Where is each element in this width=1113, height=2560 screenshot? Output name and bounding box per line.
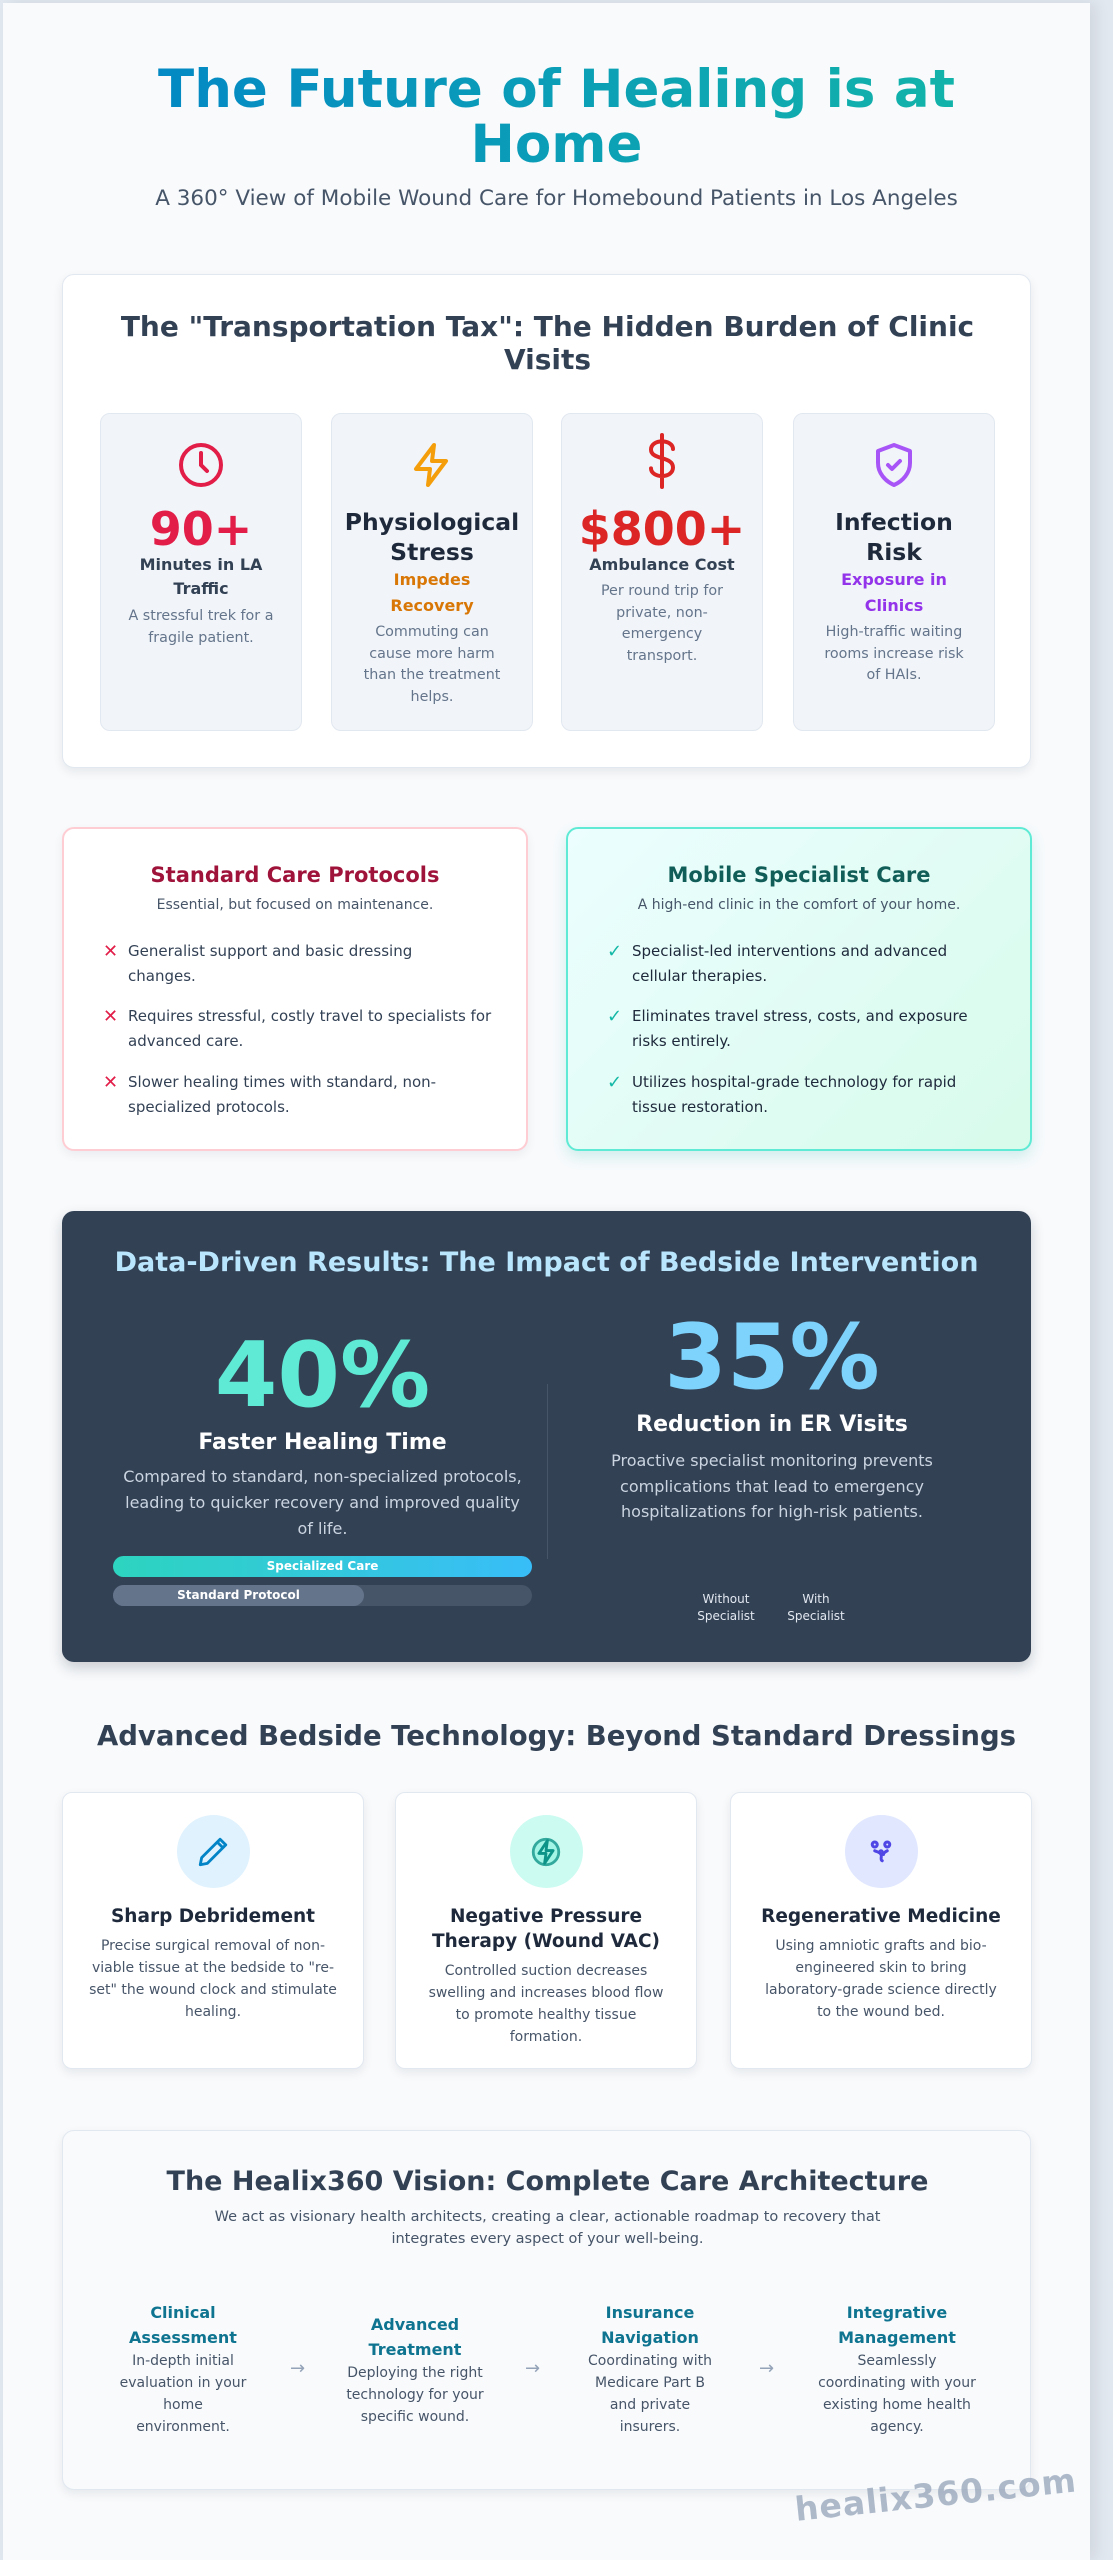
stat card: stress: Recovery [390, 596, 474, 615]
subheading: Essential, but focused on maintenance. [157, 897, 433, 913]
stat card: ambulance cost: $800+ [579, 502, 745, 556]
stat: 40% faster healing: Compared to standard, non-specialized protocols, leading to quicker recovery and improved quality [123, 1467, 522, 1512]
list item: Eliminates travel stress, costs, and exposure risks entirely. [632, 1007, 968, 1050]
list item: changes. [128, 967, 196, 985]
stat: 40% faster healing [123, 1323, 522, 1538]
chart labels: With [802, 1592, 830, 1606]
chart labels: Specialist [787, 1609, 845, 1623]
stat card: infection: Clinics [865, 596, 923, 615]
subheading: A high-end clinic in the comfort of your home. [638, 897, 960, 913]
stat card: stress: Impedes [394, 570, 470, 589]
panel: transportation tax [62, 274, 1031, 768]
panel: standard care: ✕ [103, 1072, 118, 1093]
panel: healix360 vision [62, 2130, 1031, 2490]
stat card: infection: Risk [866, 538, 922, 566]
bar chart: healing comparison [113, 1556, 532, 1606]
stat: 40% faster healing: 40% [215, 1323, 430, 1428]
stat: 40% faster healing: of life. [298, 1519, 347, 1538]
intro text: We act as visionary health architects, creating a clear, actionable roadmap to recovery that integrates every aspect of your well-being. [215, 2209, 880, 2247]
stat card: infection: Exposure in [841, 570, 947, 589]
list item: Requires stressful, costly travel to specialists for advanced care. [128, 1007, 491, 1050]
step: integrative management: Integrative [847, 2303, 947, 2322]
panel: standard care [62, 827, 528, 1151]
step: advanced treatment: Treatment [369, 2340, 461, 2359]
card: sharp debridement [62, 1792, 364, 2069]
card: negative pressure therapy: Controlled suction decreases [445, 1963, 647, 1979]
stat card: infection: Infection [835, 508, 953, 536]
panel: standard care: ✕ [103, 941, 118, 962]
list item: Specialist-led interventions and advanced cellular therapies. [632, 942, 947, 985]
subtitle: A 360° View of Mobile Wound Care for Homebound Patients in Los Angeles [155, 186, 958, 211]
card: sharp debridement: Precise surgical removal of non-viable tissue at the bedside to "re-set" the wound clock and stimulate healing. [89, 1938, 337, 2020]
stat card: stress: Physiological [345, 508, 519, 536]
step: clinical assessment [120, 2303, 246, 2435]
step: clinical assessment: Assessment [129, 2328, 237, 2347]
stat card: traffic [100, 413, 302, 731]
stat card: stress: Commuting can cause more harm than the treatment helps. [364, 624, 500, 704]
bar chart: healing comparison: Standard Protocol [177, 1588, 300, 1602]
icon: clock [179, 443, 223, 487]
heading: Standard Care Protocols [151, 863, 439, 887]
card: sharp debridement: Sharp Debridement [111, 1906, 315, 1927]
heading: Mobile Specialist Care [668, 863, 930, 887]
stat card: infection [793, 413, 995, 731]
list item: Generalist support and basic dressing [128, 942, 412, 960]
stat card: stress [331, 413, 533, 731]
step: integrative management: Management [838, 2328, 956, 2347]
stat: 35% ER reduction: Proactive specialist monitoring prevents complications that lead to emergency hospitalizations for high-risk patients. [611, 1451, 933, 1521]
step: insurance navigation: Navigation [601, 2328, 699, 2347]
title: Home [471, 114, 642, 175]
step: clinical assessment: In-depth initial evaluation in your home environment. [120, 2353, 246, 2435]
step: advanced treatment [346, 2315, 484, 2425]
icon: bolt circle [510, 1815, 582, 1888]
stat card: ambulance cost [561, 413, 763, 731]
step: insurance navigation: Insurance [606, 2303, 694, 2322]
panel: mobile specialist care: ✓ [607, 941, 622, 962]
step: clinical assessment: Clinical [150, 2303, 216, 2322]
icon: lightning [414, 443, 448, 487]
card: regenerative medicine: Using amniotic grafts and bio-engineered skin to bring laboratory-grade science directly to the wound bed. [765, 1938, 997, 2020]
card: regenerative medicine [730, 1792, 1032, 2069]
stat card: traffic: Traffic [173, 579, 229, 598]
icon: shield [876, 443, 912, 487]
stat card: stress: Stress [390, 538, 474, 566]
panel: mobile specialist care: ✓ [607, 1072, 622, 1093]
chart labels: Without [703, 1592, 749, 1606]
chart labels [697, 1592, 845, 1623]
panel: mobile specialist care [566, 827, 1032, 1151]
stat: 35% ER reduction [611, 1305, 933, 1521]
list item: Utilizes hospital-grade technology for rapid tissue restoration. [632, 1073, 956, 1116]
panel: data-driven results [62, 1211, 1031, 1662]
title: The Future of Healing is at [158, 59, 955, 120]
bar chart: healing comparison: Specialized Care [267, 1559, 378, 1573]
icon: dollar [649, 433, 675, 489]
stat: 35% ER reduction: 35% [664, 1305, 880, 1410]
stat card: ambulance cost: Per round trip for private, non-emergency transport. [601, 583, 723, 664]
chart labels: Specialist [697, 1609, 755, 1623]
list item [103, 941, 412, 985]
card: regenerative medicine: Regenerative Medicine [761, 1906, 1001, 1927]
arrow: → [525, 2358, 540, 2379]
divider [547, 1384, 548, 1559]
panel heading: The "Transportation Tax": The Hidden Burden of Clinic [121, 310, 974, 343]
list item: Slower healing times with standard, non-specialized protocols. [128, 1073, 436, 1116]
stat card: ambulance cost: Ambulance Cost [589, 555, 735, 574]
stat card: traffic: Minutes in LA [140, 555, 262, 574]
icon: cells [844, 1815, 918, 1888]
step: integrative management [818, 2303, 976, 2435]
stat card: traffic: A stressful trek for a fragile patient. [128, 608, 274, 646]
title [60, 62, 1053, 172]
stat: 40% faster healing: Faster Healing Time [198, 1430, 447, 1455]
step: insurance navigation: Coordinating with Medicare Part B and private insurers. [588, 2353, 712, 2435]
heading: Data-Driven Results: The Impact of Bedside Intervention [115, 1247, 978, 1278]
arrow: → [290, 2358, 305, 2379]
icon: pencil [176, 1815, 250, 1888]
step: advanced treatment: Deploying the right technology for your specific wound. [346, 2365, 484, 2425]
step: advanced treatment: Advanced [371, 2315, 459, 2334]
heading: The Healix360 Vision: Complete Care Architecture [167, 2166, 928, 2197]
heading: advanced bedside technology: Advanced Bedside Technology: Beyond Standard Dressings [97, 1720, 1016, 1752]
watermark: healix360.com [793, 2461, 1079, 2529]
panel heading: Visits [504, 343, 591, 376]
step: integrative management: Seamlessly [858, 2353, 936, 2369]
step: insurance navigation [588, 2303, 712, 2435]
step: integrative management: coordinating with your existing home health agency. [818, 2375, 976, 2435]
stat card: traffic: 90+ [150, 502, 252, 556]
arrow: → [759, 2358, 774, 2379]
panel: standard care: ✕ [103, 1006, 118, 1027]
card: negative pressure therapy: swelling and increases blood flow to promote healthy tissue formation. [429, 1985, 663, 2045]
card: negative pressure therapy: Therapy (Wound VAC) [432, 1931, 660, 1952]
panel heading [121, 310, 974, 376]
stat card: infection: High-traffic waiting rooms increase risk of HAIs. [824, 624, 964, 683]
panel: mobile specialist care: ✓ [607, 1006, 622, 1027]
card: negative pressure therapy: Negative Pressure [450, 1906, 642, 1927]
stat: 35% ER reduction: Reduction in ER Visits [636, 1412, 908, 1437]
card: negative pressure therapy [395, 1792, 697, 2069]
